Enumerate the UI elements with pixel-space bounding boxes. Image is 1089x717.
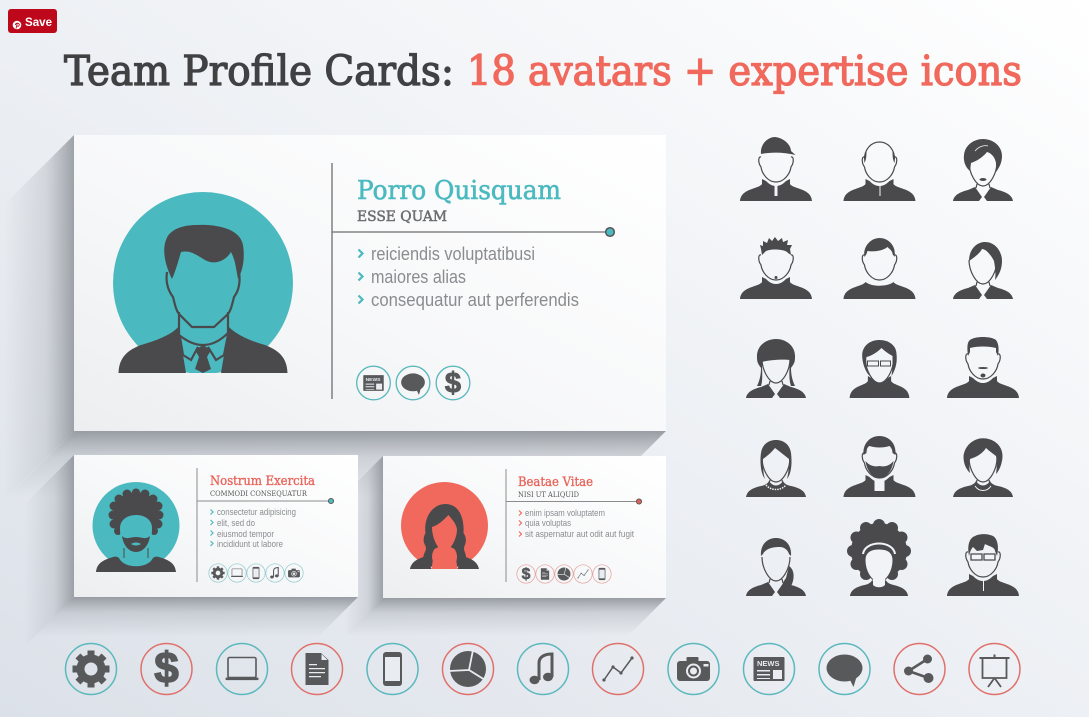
name and role: COMMODI CONSEQUATUR	[210, 489, 307, 498]
panel: card Nostrum Exercita	[74, 455, 358, 597]
icon row	[66, 644, 1020, 694]
expertise icons	[357, 366, 470, 400]
avatar 3: woman with short hair	[953, 139, 1013, 201]
icon: speech bubble	[819, 644, 870, 694]
icon: laptop	[216, 644, 268, 694]
name and role	[210, 474, 315, 498]
icon: document	[292, 644, 342, 694]
expertise icons: NEWS	[366, 377, 381, 383]
icon: newspaper	[744, 644, 794, 694]
avatar 4: man with spiky hair	[740, 237, 812, 299]
name and role	[357, 176, 561, 225]
expertise icons: $	[522, 566, 531, 583]
avatar grid	[740, 137, 1019, 596]
avatar 14: woman with afro and headband	[847, 519, 911, 596]
panel: card Beatae Vitae	[383, 456, 666, 598]
expertise list: maiores alias	[371, 267, 466, 287]
icon: share	[894, 644, 945, 694]
name and role	[518, 475, 593, 499]
large card shadows	[4, 135, 666, 500]
icon: newspaper: NEWS	[757, 659, 780, 668]
expertise list: eiusmod tempor	[217, 529, 274, 539]
avatar 15: man with glasses	[947, 534, 1019, 596]
icon: camera	[668, 644, 719, 694]
name and role: Beatae Vitae	[518, 475, 593, 490]
expertise list: reiciendis voluptatibusi	[371, 244, 535, 264]
avatar: woman with wavy hair	[401, 482, 488, 569]
avatar 6: woman with side fringe	[953, 242, 1013, 299]
expertise list: incididunt ut labore	[217, 539, 283, 549]
expertise list	[210, 507, 296, 549]
name and role: Nostrum Exercita	[210, 474, 315, 489]
expertise icons	[517, 565, 611, 583]
name and role: NISI UT ALIQUID	[518, 490, 579, 499]
avatar: afro man with beard	[92, 482, 180, 572]
icon: pie chart	[442, 644, 494, 694]
icon: presentation board	[969, 644, 1020, 694]
divider lines	[332, 163, 614, 399]
avatar 5: man with short hair	[844, 238, 916, 299]
expertise list: quia voluptas	[525, 518, 571, 528]
expertise icons: $	[445, 367, 461, 399]
expertise list	[519, 508, 634, 539]
avatar 2: bald man	[844, 142, 916, 201]
avatar 12: woman with rounded hair	[953, 438, 1013, 497]
avatar: man in suit	[113, 192, 293, 374]
icon: smartphone	[367, 644, 418, 694]
icon: dollar	[141, 644, 192, 694]
expertise list: consectetur adipisicing	[217, 507, 296, 517]
avatar 11: man with full beard	[844, 436, 916, 497]
avatar 8: woman with glasses	[850, 340, 909, 398]
avatar 9: man with goatee	[947, 337, 1019, 398]
title	[64, 46, 1022, 95]
expertise list: elit, sed do	[217, 518, 255, 528]
avatar 13: woman with ponytail	[746, 538, 806, 596]
divider lines	[197, 468, 334, 582]
divider lines	[506, 469, 642, 582]
expertise icons	[209, 564, 303, 582]
name and role: ESSE QUAM	[357, 209, 447, 225]
icon: music note	[518, 644, 568, 694]
small card shadows	[24, 455, 666, 647]
expertise list: enim ipsam voluptatem	[525, 508, 605, 518]
avatar 1: man with cap	[740, 137, 812, 201]
expertise list	[358, 244, 579, 310]
panel: large profile card	[74, 135, 666, 431]
icon: line chart	[592, 644, 644, 694]
icon: dollar: $	[154, 644, 179, 693]
expertise list: sit aspernatur aut odit aut fugit	[525, 529, 634, 539]
icon: gear	[66, 644, 116, 694]
pinterest save button	[8, 9, 57, 33]
avatar 10: woman with bob and necklace	[746, 440, 806, 497]
expertise list: consequatur aut perferendis	[371, 290, 579, 310]
avatar 7: woman with long straight hair	[746, 339, 806, 398]
title: 18 avatars + expertise icons	[467, 46, 1022, 95]
title: Team Profile Cards:	[64, 46, 454, 95]
pinterest save button: Save	[25, 15, 52, 29]
name and role: Porro Quisquam	[357, 176, 561, 206]
